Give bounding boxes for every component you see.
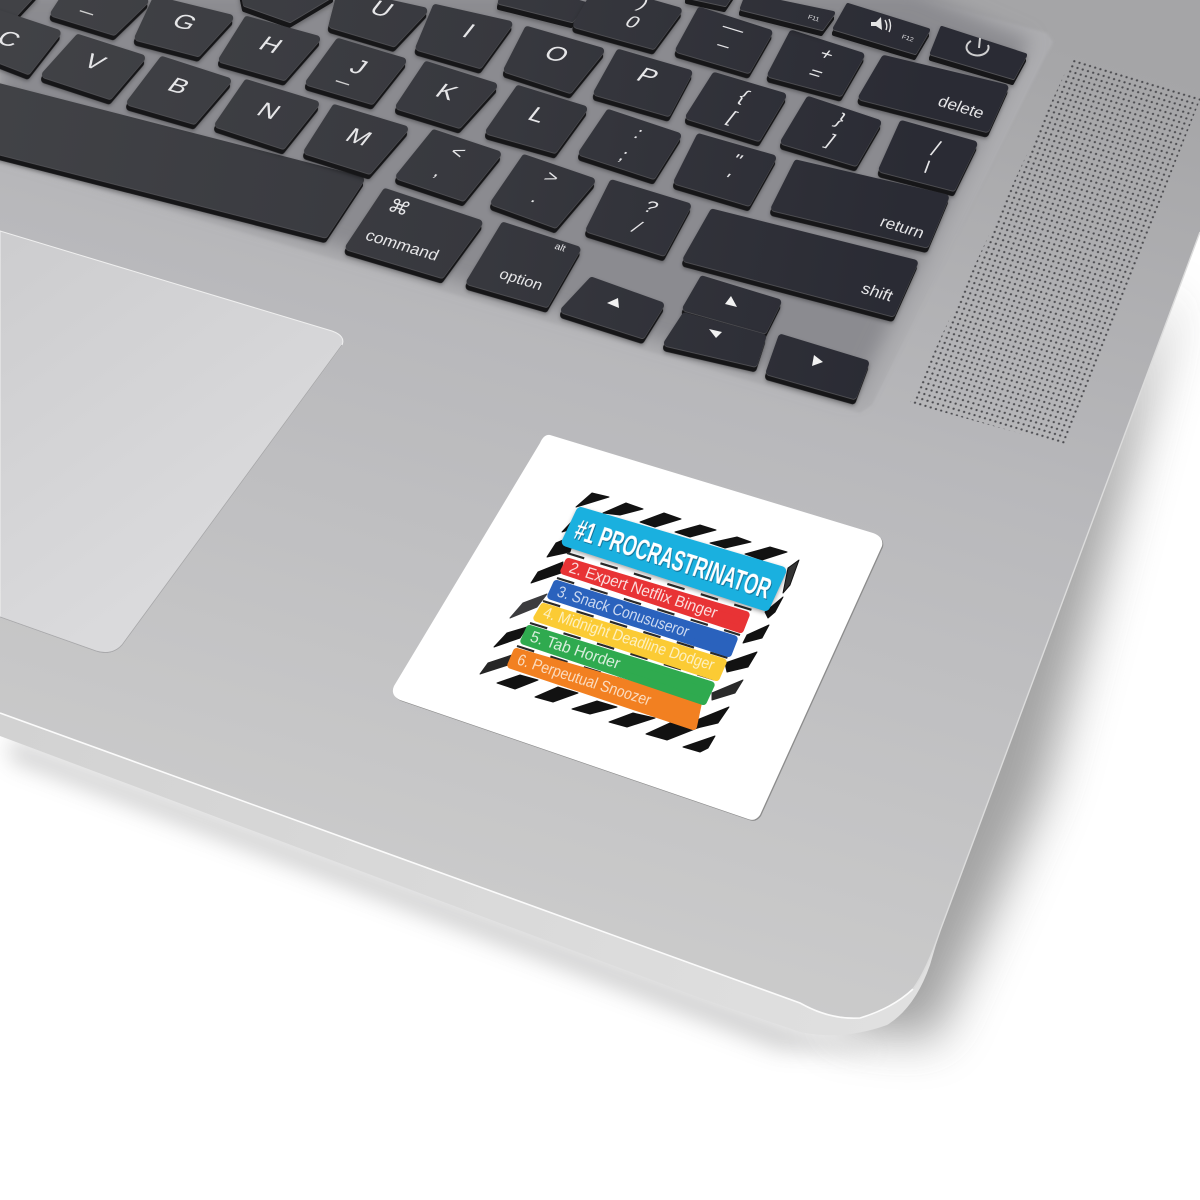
trackpad <box>0 231 343 653</box>
key: option <box>470 226 577 303</box>
speaker grille <box>910 58 1200 446</box>
key: Y partial <box>240 0 332 20</box>
key: minus <box>679 11 769 69</box>
key: power <box>932 28 1025 77</box>
key: period: > <box>539 168 564 187</box>
key: command: command <box>363 227 442 264</box>
laptop shadow: right side <box>830 285 1178 1040</box>
key: slash: / <box>627 219 646 237</box>
key: J <box>310 42 402 100</box>
key: minus: – <box>711 36 736 56</box>
key: option: alt <box>553 241 568 254</box>
front edge highlight <box>0 713 913 1018</box>
key: F11: F11 <box>807 14 821 24</box>
key: arrow down <box>668 316 762 363</box>
key: semicolon: : <box>629 125 648 143</box>
key: F11 <box>742 0 833 28</box>
bar: dark blue: 3. Snack Conususeror <box>555 583 692 640</box>
key: comma <box>400 133 497 197</box>
key: H <box>223 20 316 76</box>
key: quote: " <box>727 151 746 170</box>
key: V: V <box>78 50 111 75</box>
key: slash: ? <box>638 198 662 217</box>
sticker <box>393 435 882 820</box>
key: 0 <box>577 0 678 45</box>
laptop shadow: front edge <box>10 738 880 1052</box>
key: close bracket: ] <box>821 132 840 150</box>
key: L <box>490 89 583 149</box>
key: shift <box>687 213 914 312</box>
key: O <box>508 30 600 89</box>
sticker base <box>393 435 882 820</box>
key: delete <box>863 59 1004 128</box>
key: 0: 0 <box>620 13 644 32</box>
key: P <box>598 53 688 112</box>
key: M: M <box>340 124 377 151</box>
key: I: I <box>457 20 480 42</box>
key: comma: < <box>445 143 470 162</box>
key: backslash <box>882 124 974 187</box>
bar: green: 5. Tab Horder <box>528 628 623 672</box>
keyboard well <box>0 0 1053 413</box>
key: G: G <box>167 10 202 35</box>
key: period: . <box>526 189 545 207</box>
key: N: N <box>252 99 285 124</box>
key: B: B <box>162 74 195 99</box>
key: K <box>400 65 493 124</box>
key: spacebar <box>0 82 360 234</box>
key: M <box>308 108 404 170</box>
key: F10 partial <box>688 0 733 4</box>
key: backslash: | <box>927 139 945 156</box>
key: backslash: \ <box>917 159 936 177</box>
bar: yellow <box>537 604 723 677</box>
key: K: K <box>430 80 463 105</box>
key: open bracket: [ <box>722 109 741 127</box>
hazard stripes <box>480 493 799 752</box>
key: quote: ' <box>717 171 734 188</box>
laptop front lip <box>0 705 940 1035</box>
bar: red: 2. Expert Netflix Binger <box>567 559 720 622</box>
key: partial top left <box>0 0 36 20</box>
key: shift: shift <box>858 280 896 305</box>
right edge highlight <box>913 232 1200 989</box>
key: minus: — <box>717 17 750 40</box>
bar: yellow: 4. Midnight Deadline Dodger <box>541 604 717 674</box>
title banner: #1 PROCRASTRINATOR <box>571 514 775 605</box>
key: L: L <box>523 103 552 128</box>
key: I <box>419 8 509 64</box>
key: period <box>495 158 591 224</box>
key: B <box>131 60 227 120</box>
key: arrow right <box>770 338 865 395</box>
bar: green <box>524 628 711 701</box>
key: N <box>219 83 315 145</box>
key: 9 partial <box>500 0 586 20</box>
key: open bracket <box>690 76 782 137</box>
key: V <box>46 38 141 95</box>
key: equals: = <box>803 64 828 83</box>
key: arrow left <box>565 281 660 334</box>
key: quote <box>678 137 772 202</box>
key: semicolon: ; <box>614 147 633 165</box>
key: command: ⌘ <box>384 196 414 220</box>
stripe fragments between bars <box>517 553 752 705</box>
key: U <box>332 0 424 43</box>
trackpad lower edge <box>0 345 342 653</box>
key: semicolon <box>583 113 677 175</box>
key: H: H <box>254 33 287 58</box>
key: return: return <box>877 213 927 242</box>
key: F12 <box>835 5 928 52</box>
title banner <box>567 512 781 606</box>
key: J: J <box>344 56 372 79</box>
key: F <box>54 0 145 31</box>
key: comma: , <box>429 163 448 181</box>
bar: orange: 6. Perpeutual Snoozer <box>515 651 654 709</box>
key: arrow up <box>686 279 778 330</box>
key: delete: delete <box>935 93 987 122</box>
key: equals <box>771 34 861 92</box>
key: G <box>138 0 230 52</box>
key: slash <box>590 183 687 252</box>
key: command <box>349 192 479 274</box>
key: equals: + <box>814 45 839 64</box>
key: close bracket: } <box>831 110 851 129</box>
key: close bracket <box>785 100 877 162</box>
keyboard keys <box>0 0 1025 395</box>
key: open bracket: { <box>734 87 754 106</box>
key: O: O <box>539 42 574 67</box>
key: F12: F12 <box>901 34 915 44</box>
key: option: option <box>496 266 545 294</box>
key: return <box>775 163 945 244</box>
key: P: P <box>631 64 664 89</box>
key: C <box>0 13 57 70</box>
